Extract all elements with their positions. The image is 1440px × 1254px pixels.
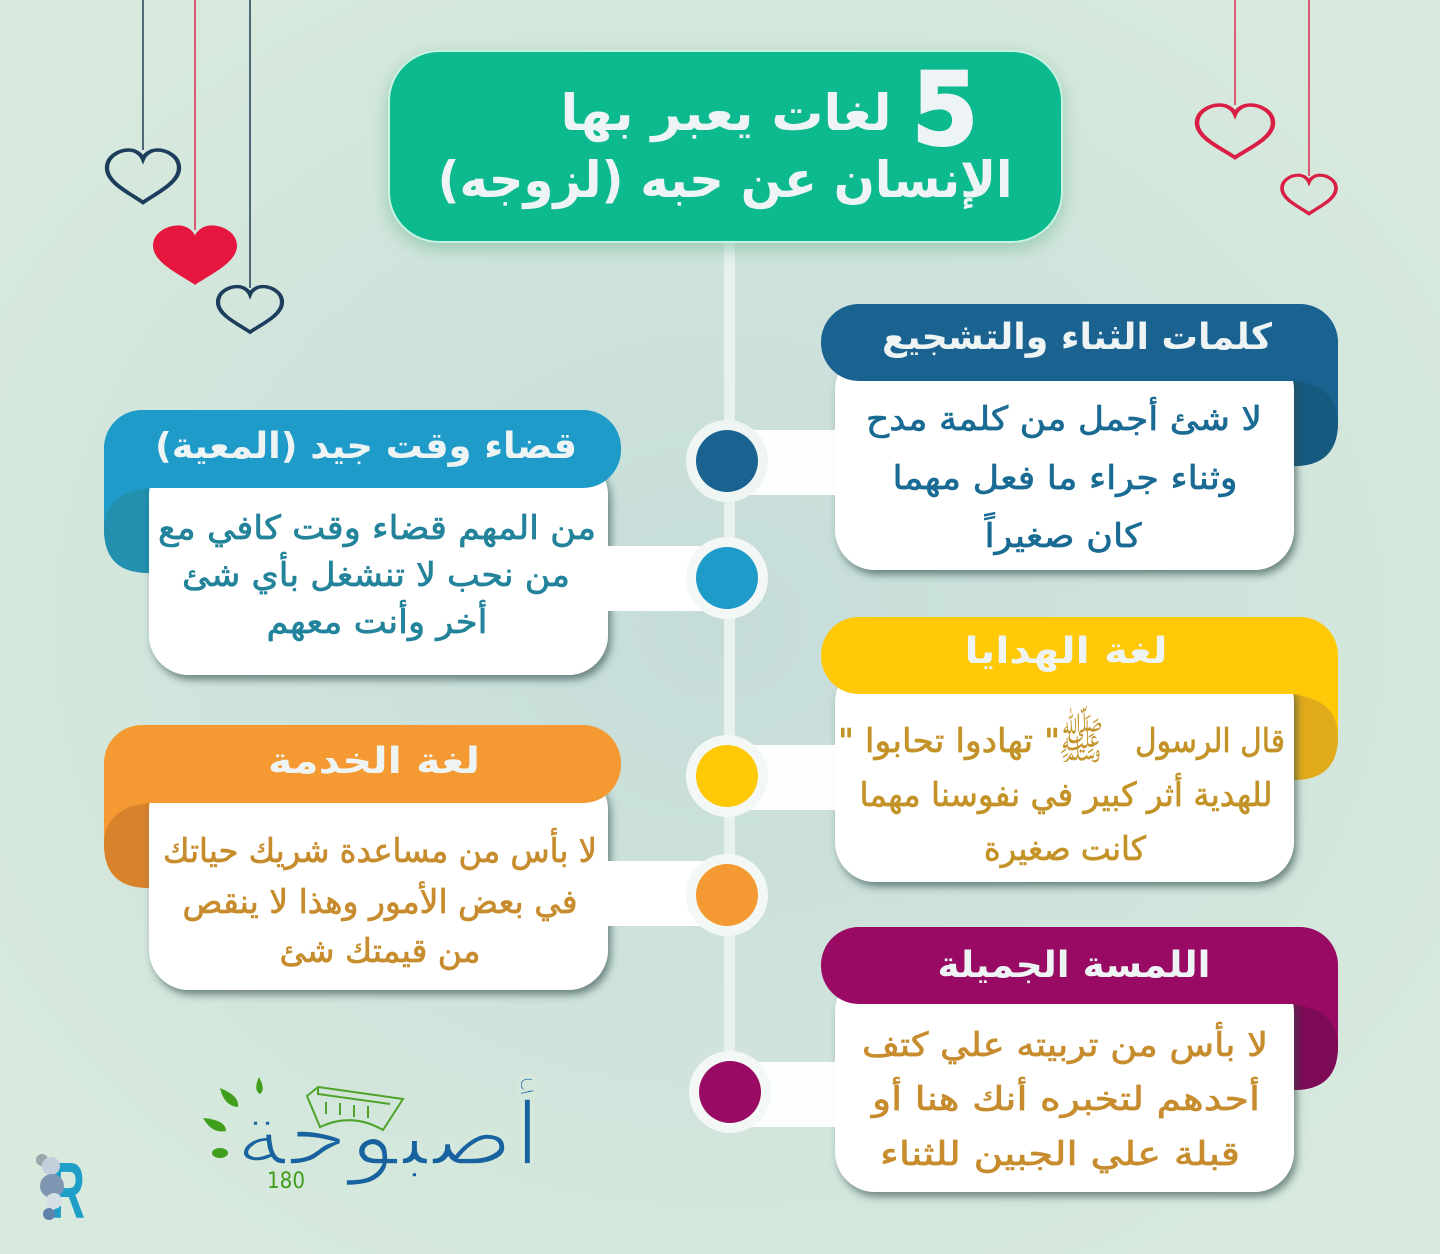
connector and dot: acts of service [606,854,768,936]
watermark R with flowers: R [51,1146,85,1235]
card: gifts: " تهادوا تحابوا " [838,721,1060,760]
card: words of praise: كلمات الثناء والتشجيع [882,317,1272,358]
card: words of praise: كان صغيراً [984,512,1142,555]
card: gentle touch [821,927,1338,1192]
card: gentle touch: أحدهم لتخبره أنك هنا أو [870,1077,1260,1118]
hanging hearts left [107,0,282,332]
card: words of praise: لا شئ أجمل من كلمة مدح [866,397,1262,438]
card: words of praise [821,304,1338,570]
card: quality time: قضاء وقت جيد (المعية) [155,426,577,467]
title panel: 5 [912,51,978,168]
card: gentle touch: لا بأس من تربيته علي كتف [862,1022,1268,1064]
connector and dot: gentle touch [689,1051,837,1133]
card: quality time: من نحب لا تنشغل بأي شئ [182,552,570,594]
logo: أصبوحة [235,1077,541,1187]
card: gifts: كانت صغيرة [984,829,1146,868]
timeline line [724,240,735,1130]
card: acts of service: لغة الخدمة [268,741,480,782]
card: acts of service: من قيمتك شئ [280,931,480,970]
card: gifts [821,617,1338,882]
connector and dot: words of praise [686,420,837,502]
card: gifts: ﷺ [1058,705,1104,770]
card: acts of service: في بعض الأمور وهذا لا ينقص [182,881,578,922]
card: quality time: أخر وأنت معهم [266,600,488,641]
card: quality time [104,410,621,675]
card: acts of service [104,725,621,990]
watermark R with flowers [36,1146,85,1235]
card: gentle touch: قبلة علي الجبين للثناء [880,1134,1240,1173]
hanging hearts right [1197,0,1336,214]
card: acts of service: لا بأس من مساعدة شريك حياتك [163,828,597,870]
title panel: لغات يعبر بها [560,84,892,143]
card: gifts: لغة الهدايا [964,631,1168,672]
card: words of praise: وثناء جراء ما فعل مهما [892,458,1238,497]
card: gentle touch: اللمسة الجميلة [938,945,1210,986]
connector and dot: quality time [606,537,768,619]
logo: 180 [267,1169,305,1194]
card: gifts: قال الرسول [1135,721,1285,760]
card: quality time: من المهم قضاء وقت كافي مع [158,508,596,547]
title panel [389,51,1062,242]
connector and dot: gifts [686,735,837,817]
card: gifts: للهدية أثر كبير في نفوسنا مهما [860,773,1272,814]
title panel: الإنسان عن حبه (لزوجه) [438,151,1012,210]
